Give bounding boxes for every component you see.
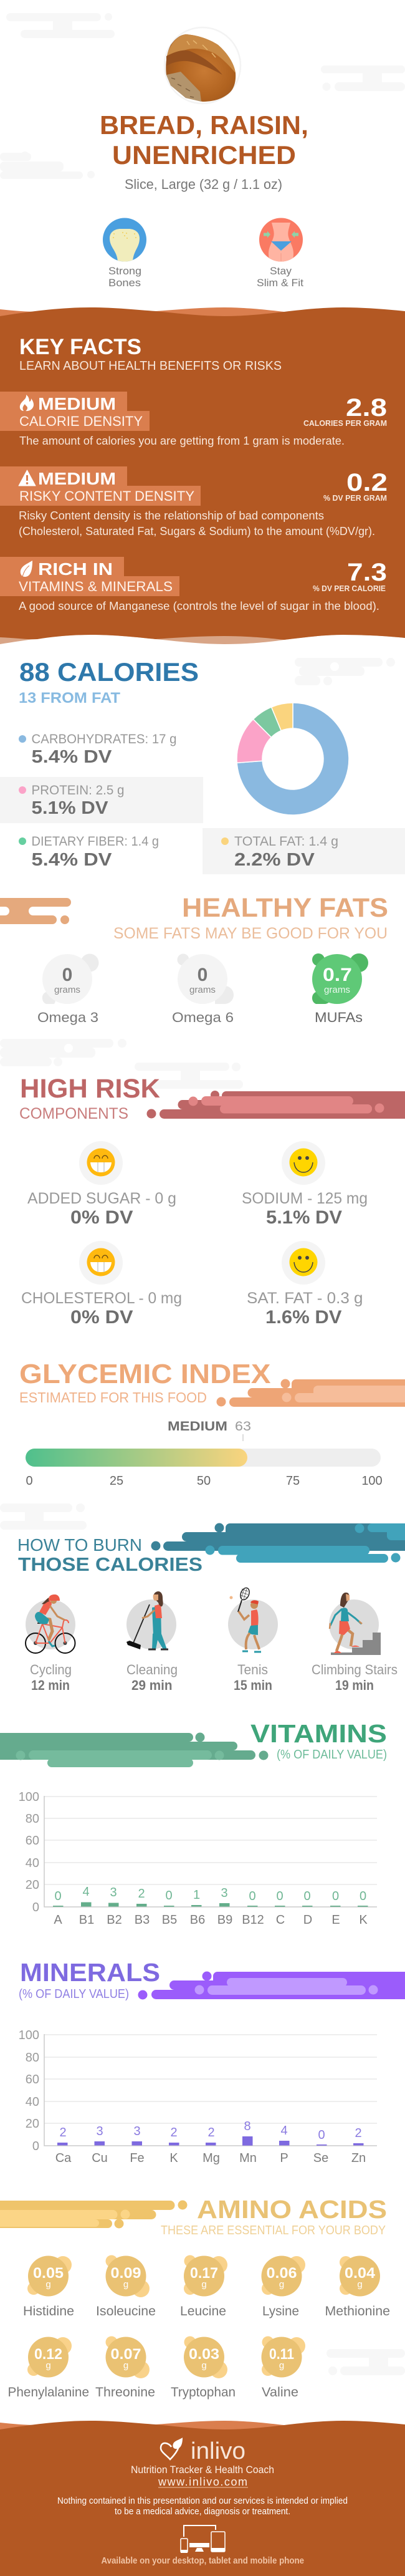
bar chart: vitamins: 0 xyxy=(332,1889,339,1903)
legend: total fat xyxy=(221,834,338,870)
legend: dietary fiber xyxy=(19,834,159,870)
amino: leucine: g xyxy=(201,2279,207,2290)
amino acids banner: THESE ARE ESSENTIAL FOR YOUR BODY xyxy=(161,2224,386,2237)
fact: calorie density: CALORIES PER GRAM xyxy=(303,418,387,428)
amino: isoleucine: Isoleucine xyxy=(96,2304,156,2318)
amino: tryptophan xyxy=(171,2336,236,2400)
amino: tryptophan: 0.03 xyxy=(189,2346,219,2363)
bar chart: vitamins: B3 xyxy=(135,1913,150,1927)
fat: MUFAs: grams xyxy=(324,985,350,995)
healthy fats banner: HEALTHY FATS xyxy=(182,893,388,923)
fact: calorie density: 2.8 xyxy=(346,394,387,422)
how to burn banner: HOW TO BURN xyxy=(17,1535,142,1555)
bar chart: vitamins: 80 xyxy=(26,1812,39,1826)
amino: methionine: 0.04 xyxy=(345,2265,376,2282)
fact: risky content density xyxy=(0,466,388,538)
bar chart: minerals: K xyxy=(169,2151,178,2165)
benefit: strong bones: Strong xyxy=(108,265,141,277)
risk: added sugar: 0% DV xyxy=(70,1207,133,1228)
minerals banner: MINERALS xyxy=(20,1958,160,1987)
fat: MUFAs: MUFAs xyxy=(315,1010,363,1025)
fact: risky content density: Risky Content density is the relationship of bad components xyxy=(19,509,324,522)
fact: rich in vitamins and minerals: % DV PER CALORIE xyxy=(313,584,386,593)
amino: histidine: Histidine xyxy=(23,2304,74,2318)
bar chart: minerals: Cu xyxy=(92,2151,108,2165)
bar chart: minerals: 0 xyxy=(32,2139,39,2153)
minerals banner: (% OF DAILY VALUE) xyxy=(19,1987,129,2001)
amino: lysine xyxy=(262,2256,305,2318)
logo: inlivo xyxy=(161,2438,245,2464)
footer tagline and link xyxy=(131,2464,274,2488)
amino: histidine xyxy=(23,2256,74,2318)
fact: risky content density: % DV PER GRAM xyxy=(323,493,387,503)
bar chart: vitamins: 3 xyxy=(221,1886,228,1900)
fat: omega 3 xyxy=(37,954,98,1025)
amino: valine xyxy=(262,2336,305,2400)
glycemic index banner: ESTIMATED FOR THIS FOOD xyxy=(19,1389,207,1406)
amino: valine: g xyxy=(279,2360,284,2371)
bar chart: minerals: 100 xyxy=(19,2028,39,2042)
amino: methionine: Methionine xyxy=(325,2304,390,2318)
risk: added sugar xyxy=(27,1141,176,1228)
bar chart: minerals: Mg xyxy=(202,2151,220,2165)
fact: calorie density: MEDIUM xyxy=(38,394,116,413)
panel: footer xyxy=(0,2421,405,2576)
legend: total fat: 2.2% DV xyxy=(234,850,315,870)
activity: tennis: Tenis xyxy=(237,1662,268,1677)
bar chart: minerals: 2 xyxy=(207,2126,215,2139)
bar chart: vitamins: B1 xyxy=(79,1913,94,1927)
calories heading xyxy=(19,657,199,707)
risk: cholesterol xyxy=(21,1241,182,1328)
bar chart: vitamins: 0 xyxy=(165,1889,173,1903)
bar chart: minerals: 2 xyxy=(355,2126,362,2140)
bar chart: vitamins: 3 xyxy=(110,1886,117,1899)
amino: phenylalanine: g xyxy=(45,2360,51,2371)
bar chart: minerals: 40 xyxy=(26,2095,39,2109)
activity: tennis xyxy=(228,1586,278,1693)
healthy fats banner: SOME FATS MAY BE GOOD FOR YOU xyxy=(113,925,388,942)
minerals banner xyxy=(19,1958,405,2001)
bar chart: vitamins: 0 xyxy=(249,1889,256,1903)
legend: total fat: TOTAL FAT: 1.4 g xyxy=(234,834,338,849)
bar chart: vitamins: K xyxy=(359,1913,368,1927)
how to burn banner xyxy=(17,1523,405,1575)
bar chart: minerals: Fe xyxy=(130,2151,145,2165)
legend: protein: PROTEIN: 2.5 g xyxy=(31,783,125,798)
legend: protein: 5.1% DV xyxy=(31,798,108,818)
amino: methionine: g xyxy=(357,2279,363,2290)
fact: rich in vitamins and minerals: 7.3 xyxy=(347,559,387,586)
bar chart: minerals: Se xyxy=(313,2151,328,2165)
glycemic index gauge: MEDIUM xyxy=(168,1419,227,1434)
bar chart: minerals: 3 xyxy=(96,2125,103,2138)
amino: histidine: 0.05 xyxy=(33,2265,64,2282)
disclaimer: to be a medical advice, diagnosis or treatment. xyxy=(115,2506,290,2517)
activity: climbing stairs xyxy=(312,1593,398,1693)
high risk banner: COMPONENTS xyxy=(19,1105,128,1122)
bar chart: minerals: 3 xyxy=(133,2125,141,2138)
amino acids banner xyxy=(0,2195,387,2237)
bar chart: vitamins: B6 xyxy=(190,1913,205,1927)
activity: cycling: Cycling xyxy=(30,1662,72,1677)
key facts heading xyxy=(19,335,282,373)
risk: added sugar: ADDED SUGAR - 0 g xyxy=(27,1190,176,1207)
bar chart: minerals xyxy=(19,2028,377,2165)
bar chart: minerals: 2 xyxy=(170,2126,178,2139)
bar chart: vitamins: 40 xyxy=(26,1856,39,1870)
risk: cholesterol: CHOLESTEROL - 0 mg xyxy=(21,1290,182,1307)
fact: risky content density: MEDIUM xyxy=(38,469,116,488)
benefit: stay slim and fit: Slim & Fit xyxy=(257,277,303,289)
benefit: stay slim and fit xyxy=(257,218,303,289)
activity: cleaning: Cleaning xyxy=(126,1662,178,1677)
availability note: Available on your desktop, tablet and mobile phone xyxy=(101,2555,304,2566)
title xyxy=(100,110,308,170)
bar chart: minerals: 20 xyxy=(26,2117,39,2131)
amino: tryptophan: Tryptophan xyxy=(171,2385,236,2400)
bar chart: vitamins: A xyxy=(54,1913,62,1927)
legend: dietary fiber: DIETARY FIBER: 1.4 g xyxy=(31,834,159,849)
title: UNENRICHED xyxy=(112,140,296,170)
amino: isoleucine: g xyxy=(123,2279,128,2290)
bar chart: vitamins: B12 xyxy=(242,1913,264,1927)
icon: devices xyxy=(181,2525,225,2553)
bar chart: vitamins: B9 xyxy=(217,1913,232,1927)
activity: cycling: 12 min xyxy=(31,1677,70,1693)
fat: omega 6: 0 xyxy=(198,965,207,985)
amino: threonine: Threonine xyxy=(95,2385,155,2400)
key facts heading: KEY FACTS xyxy=(19,335,141,359)
amino: valine: 0.11 xyxy=(269,2346,294,2363)
fat: omega 3: Omega 3 xyxy=(37,1010,98,1025)
bar chart: minerals: P xyxy=(280,2151,288,2165)
glycemic index banner: GLYCEMIC INDEX xyxy=(19,1359,271,1389)
bar chart: minerals: 2 xyxy=(59,2126,67,2139)
bar chart: minerals: 0 xyxy=(318,2128,325,2142)
fat: omega 6: grams xyxy=(189,985,216,995)
fat: MUFAs xyxy=(312,953,368,1025)
vitamins banner: VITAMINS xyxy=(250,1719,387,1748)
amino: lysine: Lysine xyxy=(262,2304,299,2318)
risk: sodium xyxy=(242,1141,368,1228)
risk: sodium: SODIUM - 125 mg xyxy=(242,1190,368,1207)
logo: inlivo: inlivo xyxy=(191,2438,245,2464)
fact: rich in vitamins and minerals: RICH IN xyxy=(38,559,113,579)
serving size: Slice, Large (32 g / 1.1 oz) xyxy=(125,176,282,192)
panel: key facts xyxy=(0,307,405,644)
glycemic index gauge: 100 xyxy=(361,1474,383,1488)
fact: risky content density: 0.2 xyxy=(346,469,388,496)
bar chart: vitamins: 100 xyxy=(19,1790,39,1804)
bar chart: vitamins: B5 xyxy=(162,1913,177,1927)
benefit: stay slim and fit: Stay xyxy=(270,265,292,277)
vitamins banner: (% OF DAILY VALUE) xyxy=(277,1748,387,1762)
title: BREAD, RAISIN, xyxy=(100,110,308,140)
amino: lysine: 0.06 xyxy=(267,2265,297,2282)
fat: MUFAs: 0.7 xyxy=(323,965,352,985)
footer tagline and link: Nutrition Tracker & Health Coach xyxy=(131,2464,274,2476)
risk: saturated fat: SAT. FAT - 0.3 g xyxy=(247,1290,363,1307)
fat: omega 6 xyxy=(172,954,234,1025)
amino: leucine: Leucine xyxy=(180,2304,226,2318)
bar chart: vitamins: 20 xyxy=(26,1878,39,1892)
glycemic index gauge: 25 xyxy=(110,1474,123,1488)
amino acids banner: AMINO ACIDS xyxy=(197,2195,387,2224)
amino: leucine: 0.17 xyxy=(190,2265,218,2282)
amino: leucine xyxy=(180,2255,227,2318)
bar chart: vitamins: 0 xyxy=(303,1889,311,1903)
fact: rich in vitamins and minerals xyxy=(0,557,387,612)
high risk banner xyxy=(19,1074,405,1122)
bar chart: minerals: 8 xyxy=(244,2120,251,2133)
legend: protein xyxy=(19,783,125,818)
bar chart: vitamins: C xyxy=(276,1913,285,1927)
fact: rich in vitamins and minerals: A good source of Manganese (controls the level of sugar in the blood). xyxy=(19,600,379,612)
disclaimer: Nothing contained in this presentation and our services is intended or implied xyxy=(57,2496,348,2506)
activity: climbing stairs: 19 min xyxy=(335,1677,374,1693)
amino: histidine: g xyxy=(45,2279,51,2290)
bar chart: vitamins: 4 xyxy=(82,1885,90,1899)
amino: phenylalanine: Phenylalanine xyxy=(7,2385,89,2400)
bar chart: vitamins: E xyxy=(331,1913,340,1927)
bar chart: vitamins: 0 xyxy=(32,1901,39,1914)
fact: calorie density xyxy=(0,392,387,447)
key facts heading: LEARN ABOUT HEALTH BENEFITS OR RISKS xyxy=(19,359,282,373)
fat: omega 3: grams xyxy=(54,985,80,995)
bar chart: vitamins: 60 xyxy=(26,1834,39,1848)
amino: phenylalanine xyxy=(7,2337,89,2400)
amino: threonine xyxy=(95,2336,155,2400)
glycemic index gauge xyxy=(26,1419,383,1488)
high risk banner: HIGH RISK xyxy=(20,1074,160,1104)
amino: methionine xyxy=(325,2256,390,2318)
how to burn banner: THOSE CALORIES xyxy=(18,1553,202,1575)
vitamins banner xyxy=(0,1719,387,1767)
benefit: strong bones xyxy=(103,218,146,289)
amino: tryptophan: g xyxy=(201,2360,207,2371)
bar chart: minerals: Zn xyxy=(351,2151,366,2165)
footer tagline and link: www.inlivo.com xyxy=(158,2476,247,2488)
bar chart: vitamins: 0 xyxy=(276,1889,284,1903)
amino: valine: Valine xyxy=(262,2385,298,2400)
amino: isoleucine: 0.09 xyxy=(111,2265,141,2282)
bar chart: vitamins: 2 xyxy=(138,1887,145,1901)
healthy fats banner xyxy=(0,893,388,942)
legend: dietary fiber: 5.4% DV xyxy=(31,850,112,870)
fat: omega 3: 0 xyxy=(62,965,72,985)
calories heading: 88 CALORIES xyxy=(19,657,199,687)
donut chart: calorie sources xyxy=(237,703,349,815)
bar chart: vitamins: 0 xyxy=(360,1889,366,1903)
activity: tennis: 15 min xyxy=(234,1677,272,1693)
benefit: strong bones: Bones xyxy=(108,277,141,289)
legend: carbohydrates: 5.4% DV xyxy=(31,747,112,767)
disclaimer xyxy=(57,2496,348,2517)
legend: carbohydrates xyxy=(19,732,177,767)
bar chart: vitamins: B2 xyxy=(107,1913,122,1927)
fact: rich in vitamins and minerals: VITAMINS & MINERALS xyxy=(19,579,173,594)
fact: calorie density: The amount of calories you are getting from 1 gram is moderate. xyxy=(19,435,345,447)
bar chart: minerals: 4 xyxy=(280,2124,288,2138)
calories heading: 13 FROM FAT xyxy=(19,690,120,707)
glycemic index banner xyxy=(19,1359,405,1407)
amino: threonine: 0.07 xyxy=(111,2346,141,2363)
bar chart: minerals: Ca xyxy=(55,2151,72,2165)
legend: carbohydrates: CARBOHYDRATES: 17 g xyxy=(31,732,177,746)
risk: sodium: 5.1% DV xyxy=(266,1207,342,1228)
activity: cleaning: 29 min xyxy=(131,1677,172,1693)
activity: cleaning xyxy=(126,1591,178,1693)
glycemic index gauge: 63 xyxy=(235,1419,251,1434)
risk: saturated fat: 1.6% DV xyxy=(265,1307,341,1328)
fat: omega 6: Omega 6 xyxy=(172,1010,234,1025)
activity: climbing stairs: Climbing Stairs xyxy=(312,1662,398,1677)
fact: risky content density: (Cholesterol, Saturated Fat, Sugars & Sodium) to the amount (%DV/gr). xyxy=(19,525,375,538)
fact: calorie density: CALORIE DENSITY xyxy=(19,413,143,429)
legend panels background xyxy=(0,777,405,874)
bar chart: vitamins: 1 xyxy=(193,1888,200,1902)
amino: phenylalanine: 0.12 xyxy=(34,2346,62,2363)
bar chart: minerals: 80 xyxy=(26,2051,39,2065)
risk: saturated fat xyxy=(247,1241,363,1328)
food photo: bread in ring xyxy=(164,27,241,104)
fact: risky content density: RISKY CONTENT DENSITY xyxy=(19,488,194,504)
bar chart: minerals: 60 xyxy=(26,2073,39,2086)
glycemic index gauge: 75 xyxy=(286,1474,300,1488)
amino: threonine: g xyxy=(123,2360,128,2371)
risk: cholesterol: 0% DV xyxy=(70,1307,133,1328)
glycemic index gauge: 50 xyxy=(197,1474,211,1488)
bar chart: minerals: Mn xyxy=(239,2151,257,2165)
amino: lysine: g xyxy=(279,2279,284,2290)
bar chart: vitamins: D xyxy=(303,1913,312,1927)
activity: cycling xyxy=(26,1594,75,1693)
bar chart: vitamins xyxy=(19,1790,377,1927)
bar chart: vitamins: 0 xyxy=(54,1889,62,1903)
amino: isoleucine xyxy=(96,2255,156,2318)
glycemic index gauge: 0 xyxy=(26,1474,33,1488)
